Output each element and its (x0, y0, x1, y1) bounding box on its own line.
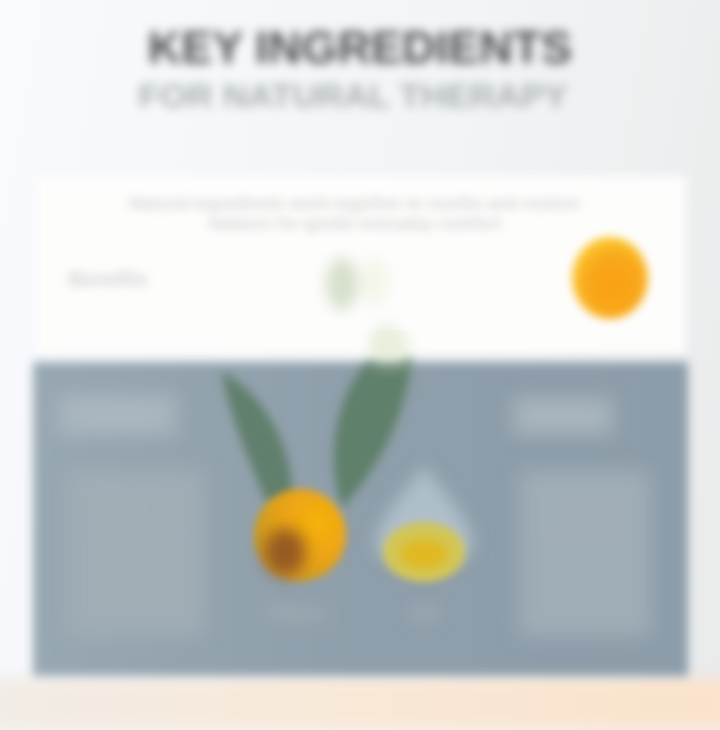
peach floor band (0, 678, 720, 730)
left text block (68, 471, 204, 636)
right text block: Nourishes and restores with pure plant oils daily (529, 475, 641, 539)
left heading (58, 395, 176, 435)
right column (510, 393, 654, 637)
left column (58, 392, 200, 632)
left leaf (222, 372, 292, 502)
right heading: Oils (537, 400, 589, 431)
fruit label: Citrus (268, 603, 326, 625)
intro text block: balance for gentle everyday comfort (209, 214, 501, 233)
icon: orange sun (565, 230, 656, 326)
oil drop (376, 465, 472, 582)
left text block: Soothes skin and helps relax tired muscles every day (78, 475, 194, 539)
right leaf (334, 358, 412, 508)
fruit (254, 489, 346, 581)
panel: ingredients (33, 362, 688, 676)
illustration: leaves, fruit and oil drop (218, 330, 476, 625)
panel: intro (36, 176, 686, 354)
intro text block (129, 194, 580, 233)
pale leaf tip (372, 330, 408, 362)
left heading: Calm (80, 398, 154, 431)
title: KEY INGREDIENTS (148, 22, 572, 73)
intro label: Benefits (69, 269, 147, 291)
right heading (513, 397, 613, 435)
intro text block: Natural ingredients work together to soothe and restore (130, 194, 580, 213)
icon: green sprout (320, 253, 400, 354)
right text block (519, 471, 651, 636)
drop label: Oil (411, 603, 437, 625)
subtitle: FOR NATURAL THERAPY (139, 78, 567, 114)
